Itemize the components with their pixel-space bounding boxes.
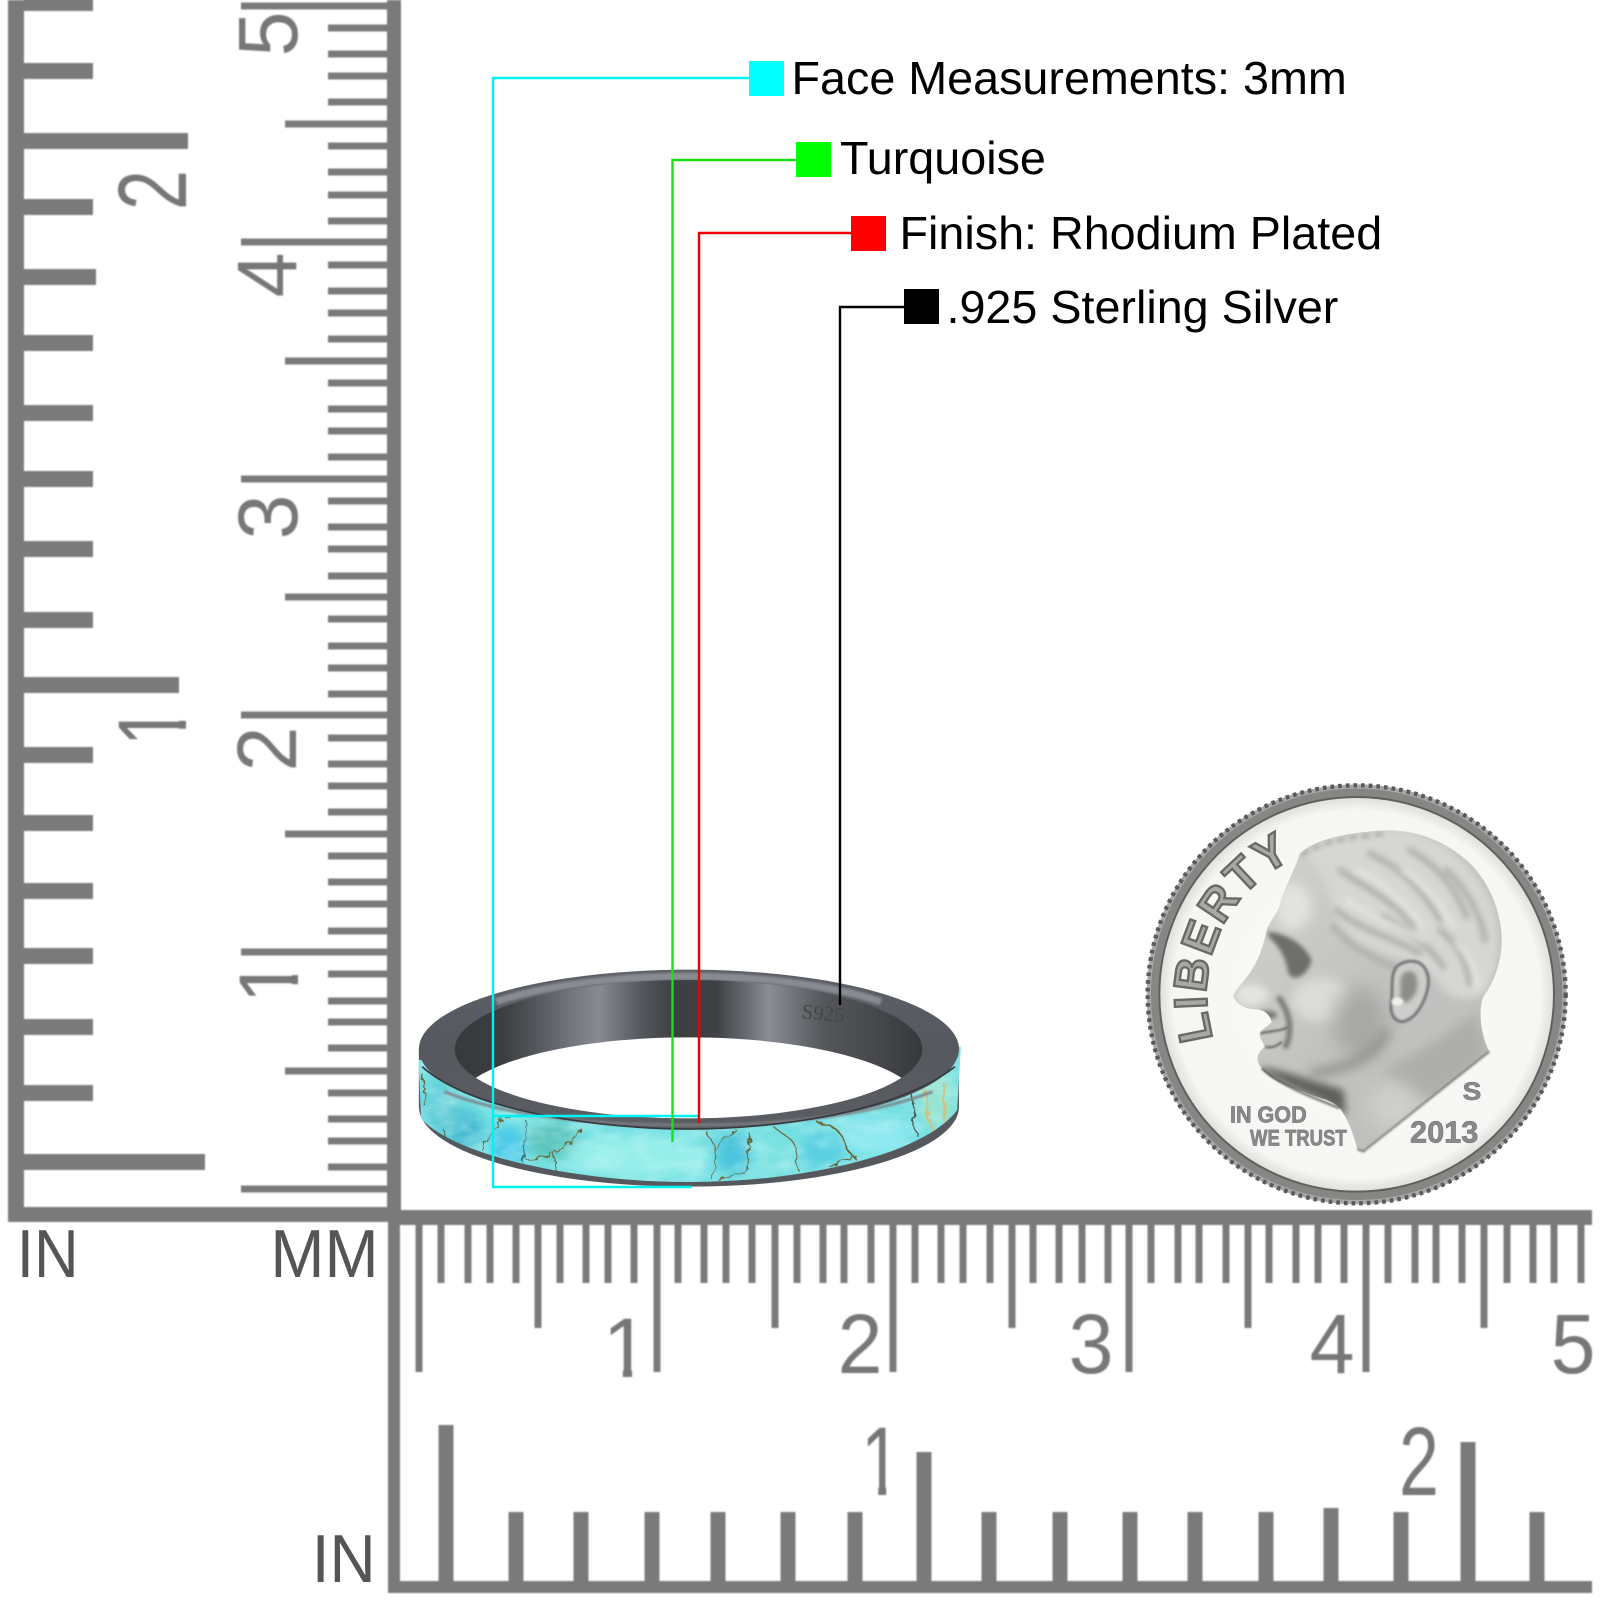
portrait brow and eye shadow: [1268, 932, 1312, 978]
horizontal ruler frame: [388, 1210, 1592, 1593]
portrait hair highlights: [1347, 870, 1477, 987]
vertical ruler inch numerals: [117, 172, 187, 740]
portrait ear: [1391, 961, 1428, 1022]
vertical ruler millimetre numerals: 5: [222, 12, 315, 56]
unit labels: [17, 1215, 379, 1596]
coin inscriptions: IN GOD: [1230, 1102, 1307, 1128]
coin inscriptions: WE TRUST: [1250, 1125, 1347, 1150]
ring photo: [415, 970, 966, 1187]
horizontal millimetre numerals: [610, 1313, 1593, 1378]
black silver leader: [840, 307, 904, 1005]
unit labels: IN: [17, 1215, 79, 1292]
horizontal inch numerals: [867, 1426, 1436, 1496]
vertical ruler millimetre numerals: 3: [222, 495, 315, 539]
vertical ruler inch numerals: 2: [100, 170, 208, 210]
ring opening: [476, 1037, 902, 1118]
portrait: [1233, 830, 1502, 1152]
LIBERTY lettering: LIBERTY: [1172, 830, 1283, 1044]
portrait hair strands: [1333, 850, 1485, 983]
horizontal millimetre ticks: [419, 1225, 1581, 1372]
ring inner wall: [455, 980, 922, 1118]
green turquoise leader: [672, 160, 796, 1142]
horizontal millimetre numerals: 1: [603, 1301, 649, 1395]
turquoise inlay: [415, 1043, 966, 1187]
legend: finish: Finish: Rhodium Plated: [900, 207, 1382, 259]
dime: [1146, 783, 1568, 1206]
inch ticks: [24, 3, 205, 1162]
panel: vertical ruler: [8, 0, 401, 1222]
portrait hair mass: [1307, 831, 1498, 999]
coin rim: [1155, 792, 1559, 1196]
coin field: [1159, 797, 1554, 1192]
unit labels: MM: [270, 1217, 379, 1292]
portrait hairline: [1302, 834, 1383, 855]
horizontal millimetre numerals: 5: [1551, 1298, 1595, 1391]
portrait cheek and nose light: [1292, 978, 1352, 1022]
horizontal millimetre numerals: 4: [1310, 1298, 1354, 1391]
portrait shading: [1235, 831, 1498, 1130]
portrait jaw shadow: [1262, 1067, 1347, 1117]
ring outer band base: [419, 1048, 959, 1187]
unit labels: IN: [312, 1520, 376, 1596]
vertical ruler millimetre numerals: 4: [221, 253, 314, 297]
horizontal millimetre numerals: 3: [1069, 1298, 1113, 1391]
coin inscriptions: [1230, 1079, 1481, 1150]
turquoise mottling: [418, 1058, 960, 1182]
vertical ruler millimetre numerals: 2: [221, 727, 314, 771]
portrait mouth lines: [1261, 1027, 1340, 1108]
legend: face measurements: Face Measurements: 3mm: [792, 52, 1347, 104]
portrait lower neck edge: [1357, 1052, 1489, 1152]
vertical ruler millimetre numerals: [236, 14, 299, 997]
portrait temple and cheek shading: [1333, 987, 1387, 1060]
turquoise matrix veins: [422, 1073, 948, 1180]
coin inscriptions: S: [1463, 1079, 1481, 1106]
portrait forehead light: [1275, 883, 1312, 930]
ring bevel highlights: [422, 976, 955, 1129]
horizontal millimetre numerals: 2: [838, 1298, 882, 1391]
coin body: [1147, 784, 1567, 1204]
coin inscriptions: 2013: [1410, 1116, 1478, 1150]
ruler frame: [8, 0, 401, 1222]
S925 hallmark: S925: [800, 999, 846, 1027]
callout lines: [493, 78, 904, 1187]
portrait nose shadow and fold: [1278, 997, 1290, 1048]
red finish leader: [699, 233, 851, 1123]
vertical ruler inch numerals: 1: [100, 706, 208, 746]
vertical ruler millimetre numerals: 1: [223, 959, 316, 1003]
legend: [749, 52, 1382, 333]
millimetre ticks: [241, 6, 387, 1189]
ring top face: [419, 970, 959, 1128]
cyan face width bracket: [493, 78, 749, 1187]
portrait neck shading: [1388, 1018, 1487, 1098]
horizontal inch ticks: [446, 1425, 1537, 1582]
legend: turquoise: Turquoise: [840, 132, 1046, 184]
coin reeded edge: [1148, 785, 1566, 1203]
horizontal inch numerals: 1: [861, 1409, 901, 1517]
horizontal inch numerals: 2: [1399, 1409, 1439, 1517]
legend: sterling silver: .925 Sterling Silver: [946, 281, 1338, 333]
panel: horizontal ruler: [388, 1210, 1595, 1593]
